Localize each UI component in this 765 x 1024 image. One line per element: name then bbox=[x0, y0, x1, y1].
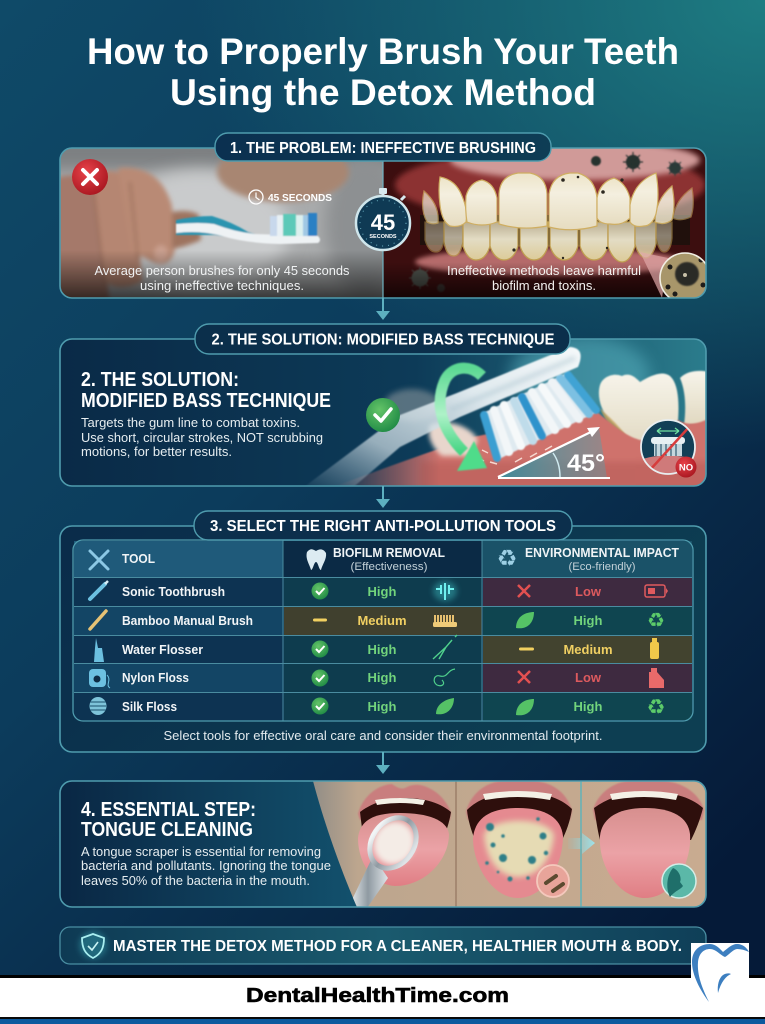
illustration: brush at 45 degrees on gum line bbox=[300, 335, 710, 490]
photo: stained teeth bbox=[384, 148, 706, 298]
text: tongue description bbox=[81, 844, 331, 888]
caption: biofilm and toxins: Ineffective methods leave harmful bbox=[447, 263, 641, 278]
lower teeth bbox=[425, 222, 672, 262]
inset: bacteria magnified bbox=[537, 865, 569, 897]
icon: leaf bbox=[516, 612, 534, 628]
column header: tool bbox=[90, 551, 155, 569]
icon: low battery bbox=[645, 585, 668, 597]
column header: biofilm removal bbox=[307, 546, 445, 573]
upper teeth bbox=[423, 173, 693, 230]
panel: anti-pollution tools bbox=[60, 511, 706, 752]
heading: modified bass technique bbox=[81, 369, 331, 412]
heading: tongue cleaning: TONGUE CLEANING bbox=[81, 819, 253, 841]
column header: tool: TOOL bbox=[122, 552, 155, 566]
icon: plastic jug bbox=[649, 668, 664, 688]
photos: three tongue views bbox=[310, 781, 710, 908]
mouth: scraper on tongue bbox=[348, 784, 451, 908]
title: Using the Detox Method bbox=[170, 71, 596, 113]
heading badge: 2. the solution: 2. THE SOLUTION: MODIFIED BASS TECHNIQUE bbox=[212, 332, 555, 348]
text: solution description: Targets the gum line to combat toxins. bbox=[81, 415, 300, 430]
gum bbox=[335, 412, 710, 490]
column header: environmental impact: ENVIRONMENTAL IMPACT bbox=[525, 546, 679, 560]
arrow: solution to tools bbox=[376, 486, 390, 508]
caption: biofilm and toxins bbox=[447, 263, 641, 293]
arrow: before to after bbox=[568, 833, 595, 854]
icon: stopwatch bbox=[356, 188, 410, 250]
icon: water jet bbox=[433, 635, 457, 659]
row stripes bbox=[74, 578, 692, 720]
column header: environmental impact bbox=[497, 545, 679, 573]
icon: circular stroke arrow bbox=[440, 368, 487, 471]
row: silk floss: High bbox=[574, 699, 602, 714]
arrow: problem to solution bbox=[376, 298, 390, 320]
icon: no scrubbing bbox=[640, 420, 696, 480]
heading badge: 2. the solution bbox=[195, 324, 570, 354]
heading: tongue cleaning bbox=[81, 799, 256, 841]
heading badge: 3. select tools bbox=[194, 511, 572, 540]
photo: hand brushing with toothbrush bbox=[60, 148, 382, 298]
caption: average brushing time: Average person brushes for only 45 seconds bbox=[94, 263, 350, 278]
caption: average brushing time: using ineffective techniques. bbox=[140, 278, 304, 293]
hand bbox=[50, 168, 201, 305]
icon: shield bbox=[79, 931, 107, 959]
row: silk floss: High bbox=[368, 699, 396, 714]
icon: green check bbox=[366, 398, 400, 432]
inset: biofilm magnified bbox=[640, 252, 706, 298]
text: solution description: Use short, circular strokes, NOT scrubbing bbox=[81, 430, 323, 445]
row: bamboo manual brush: High bbox=[574, 613, 602, 628]
row: nylon floss bbox=[89, 668, 664, 688]
row: sonic toothbrush: Sonic Toothbrush bbox=[122, 585, 225, 599]
heading badge: 1. the problem: 1. THE PROBLEM: INEFFECTIVE BRUSHING bbox=[230, 140, 536, 157]
panel: the solution bbox=[60, 324, 710, 490]
table: tool comparison bbox=[73, 540, 693, 721]
panel: the problem bbox=[59, 132, 707, 299]
icon: flosser bbox=[94, 638, 104, 662]
icon: silk leaf bbox=[436, 698, 454, 714]
heading: modified bass technique: 2. THE SOLUTION: bbox=[81, 369, 239, 391]
toothbrush bbox=[176, 213, 320, 244]
row: water flosser: Water Flosser bbox=[122, 643, 203, 657]
text: tongue description: bacteria and pollutants. Ignoring the tongue bbox=[81, 858, 331, 873]
icon: yellow bottle bbox=[650, 638, 659, 659]
arrow: tools to tongue cleaning bbox=[376, 752, 390, 774]
banner: master the detox method bbox=[60, 927, 706, 964]
column header: biofilm removal: (Effectiveness) bbox=[350, 561, 428, 573]
row: sonic toothbrush: High bbox=[368, 584, 396, 599]
mouth: clean tongue bbox=[593, 781, 704, 898]
icon: wooden brush head bbox=[433, 615, 457, 627]
row: nylon floss: High bbox=[368, 670, 396, 685]
logo: blue tooth bbox=[691, 943, 749, 1002]
caption: biofilm and toxins: biofilm and toxins. bbox=[492, 278, 596, 293]
label: 45 seconds clock: 45 SECONDS bbox=[268, 192, 332, 204]
icon: bamboo brush bbox=[90, 611, 106, 629]
text: tongue description: A tongue scraper is essential for removing bbox=[81, 844, 321, 859]
icon: fresh breath bbox=[662, 864, 696, 898]
brush handle and head bbox=[300, 347, 581, 490]
icon: recycle leaves: ♻ bbox=[647, 610, 665, 632]
label: 45 seconds clock bbox=[249, 190, 332, 204]
icon: glowing brush bbox=[433, 581, 457, 601]
panel: tongue cleaning bbox=[60, 781, 710, 908]
icon: floss strand bbox=[434, 669, 455, 686]
text: tongue description: leaves 50% of the bacteria in the mouth. bbox=[81, 873, 310, 888]
caption: average brushing time bbox=[94, 263, 350, 293]
row: bamboo manual brush: Medium bbox=[357, 613, 407, 628]
icon: floss box bbox=[89, 669, 110, 688]
icon: no scrubbing: NO bbox=[679, 462, 693, 474]
title bbox=[87, 30, 679, 113]
column header: environmental impact: (Eco-friendly) bbox=[568, 561, 636, 573]
row: water flosser bbox=[94, 635, 659, 662]
row: silk floss: Silk Floss bbox=[122, 700, 177, 714]
diagram: 45 degree angle bbox=[498, 427, 610, 478]
icon: red cross bbox=[72, 159, 108, 195]
diagram: 45 degree angle: 45° bbox=[567, 450, 605, 477]
icon: leaf bbox=[516, 699, 534, 715]
row: sonic toothbrush bbox=[90, 581, 668, 601]
row: water flosser: High bbox=[368, 642, 396, 657]
caption: tools note: Select tools for effective oral care and consider their environmental footprint. bbox=[164, 728, 602, 743]
icon: germs bbox=[409, 152, 683, 292]
row: water flosser: Medium bbox=[563, 642, 613, 657]
row: bamboo manual brush: Bamboo Manual Brush bbox=[122, 614, 253, 628]
text: solution description bbox=[81, 415, 323, 459]
row: sonic toothbrush: Low bbox=[575, 584, 602, 599]
icon: recycle: ♻ bbox=[647, 696, 665, 719]
row: bamboo manual brush bbox=[90, 610, 665, 632]
row: nylon floss: Nylon Floss bbox=[122, 671, 189, 685]
teeth bbox=[598, 370, 706, 441]
heading badge: 3. select tools: 3. SELECT THE RIGHT ANTI-POLLUTION TOOLS bbox=[210, 518, 556, 535]
icon: silk spool bbox=[90, 697, 106, 715]
footer: website: DentalHealthTime.com bbox=[246, 985, 509, 1007]
footer: website bbox=[0, 975, 765, 1024]
column header: environmental impact: ♻ bbox=[497, 545, 517, 571]
column header: biofilm removal: BIOFILM REMOVAL bbox=[333, 546, 445, 560]
row: nylon floss: Low bbox=[575, 670, 602, 685]
title: How to Properly Brush Your Teeth bbox=[87, 30, 679, 72]
icon: stopwatch: SECONDS bbox=[369, 234, 397, 240]
back tooth bbox=[429, 422, 478, 456]
bristles bbox=[483, 373, 597, 460]
banner: master the detox method: MASTER THE DETOX METHOD FOR A CLEANER, HEALTHIER MOUTH & BODY. bbox=[113, 938, 682, 955]
icon: stopwatch: 45 bbox=[371, 210, 395, 235]
row: silk floss bbox=[90, 696, 665, 719]
tongue scraper bbox=[353, 815, 419, 906]
text: solution description: motions, for better results. bbox=[81, 444, 232, 459]
heading badge: 1. the problem bbox=[215, 133, 551, 161]
icon: sonic brush bbox=[90, 581, 108, 599]
heading: tongue cleaning: 4. ESSENTIAL STEP: bbox=[81, 799, 256, 821]
heading: modified bass technique: MODIFIED BASS TECHNIQUE bbox=[81, 390, 331, 412]
mouth: coated tongue with bacteria bbox=[466, 781, 572, 898]
gum sparkles bbox=[478, 446, 552, 464]
